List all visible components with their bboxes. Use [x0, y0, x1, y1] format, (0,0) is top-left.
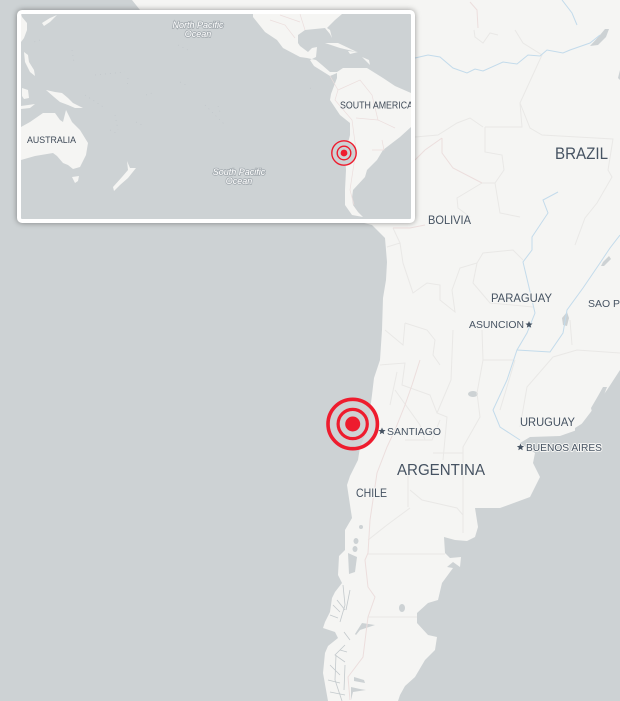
label: AUSTRALIA: AUSTRALIA	[27, 135, 77, 146]
label: North Pacific Ocean: Ocean	[185, 29, 211, 39]
label: URUGUAY: URUGUAY	[520, 415, 575, 429]
inset islands	[34, 40, 314, 133]
label: SANTIAGO: SANTIAGO	[387, 426, 441, 438]
label: BOLIVIA: BOLIVIA	[428, 213, 471, 227]
inset borders	[270, 14, 395, 205]
label: SAO PAULO (cut off): SAO P	[588, 298, 620, 310]
label: North Pacific Ocean: North Pacific	[172, 20, 224, 30]
land: South America	[132, 0, 620, 701]
label: PARAGUAY: PARAGUAY	[491, 291, 552, 305]
earthquake epicenter marker	[328, 399, 377, 449]
international borders	[348, 2, 482, 700]
lakes and fjords	[348, 29, 620, 700]
chilean fjords	[328, 585, 350, 701]
icon: capital star Santiago	[378, 428, 386, 434]
label: South Pacific Ocean: South Pacific	[213, 167, 266, 177]
label: BUENOS AIRES: BUENOS AIRES	[526, 442, 602, 454]
label: ASUNCION: ASUNCION	[469, 319, 524, 331]
icon: capital star Buenos Aires	[517, 444, 524, 450]
panel: Pacific overview inset	[17, 10, 415, 223]
rivers	[415, 0, 620, 440]
label: ARGENTINA: ARGENTINA	[397, 462, 485, 479]
icon: capital star Asuncion	[525, 321, 533, 328]
admin borders	[368, 30, 620, 617]
label: BRAZIL: BRAZIL	[555, 145, 608, 163]
label: North Pacific Ocean	[172, 20, 224, 39]
label: CHILE: CHILE	[356, 486, 387, 500]
label: South Pacific Ocean: Ocean	[226, 176, 252, 186]
inset epicenter marker	[332, 141, 356, 165]
label: South Pacific Ocean	[213, 167, 266, 186]
land: inset landmasses	[21, 14, 411, 217]
